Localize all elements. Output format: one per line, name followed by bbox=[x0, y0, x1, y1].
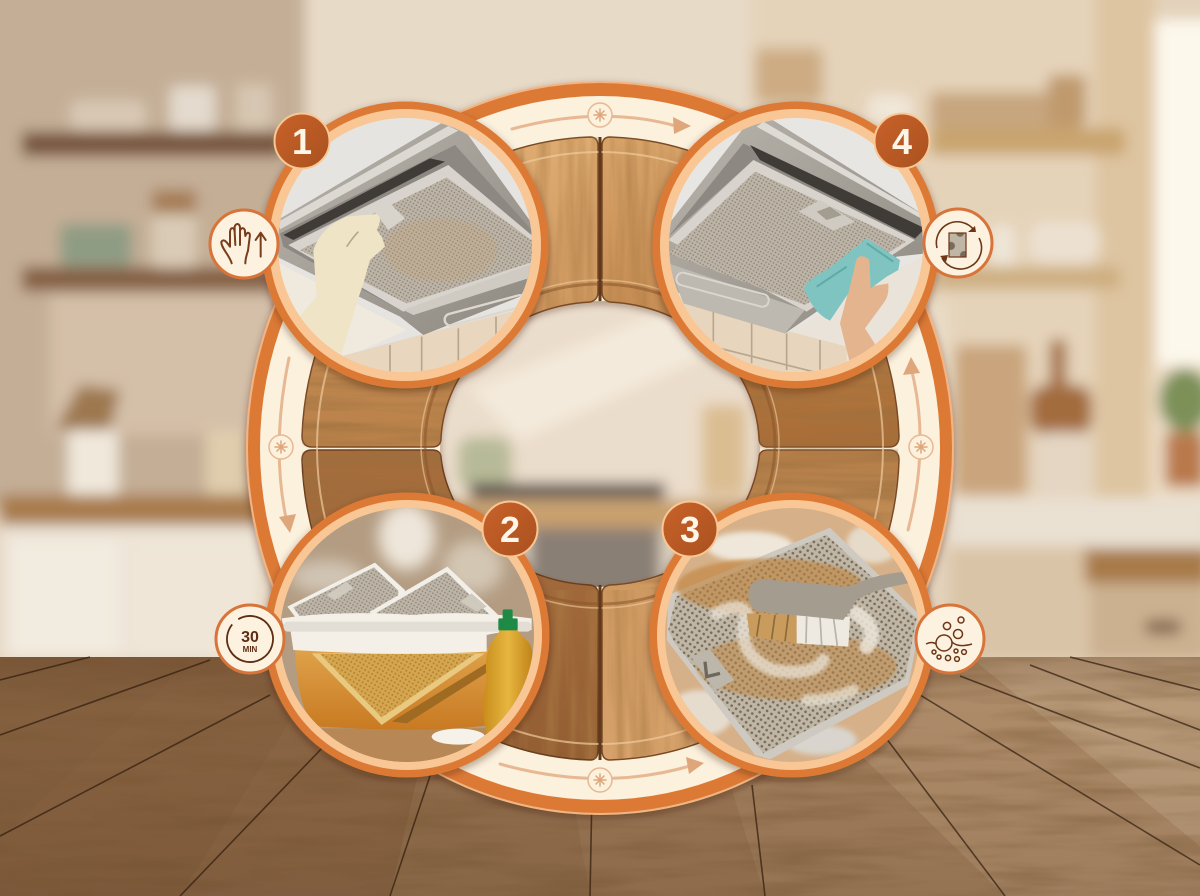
wooden table planks bbox=[0, 657, 1200, 896]
photo: hand wiping clean filter with teal cloth bbox=[669, 118, 923, 372]
number badge 1 bbox=[274, 114, 330, 168]
icon: filter with refresh arrows bbox=[924, 209, 992, 277]
number badge 2: 2 bbox=[500, 509, 520, 550]
icon: 30 minute timer: MIN bbox=[243, 645, 258, 654]
board: top left bbox=[302, 137, 598, 447]
arrow: bottom bbox=[500, 757, 704, 792]
blurred kitchen background bbox=[0, 0, 1200, 680]
number badge 1: 1 bbox=[292, 121, 312, 162]
number badge 4: 4 bbox=[892, 121, 912, 162]
circular flow ring bbox=[246, 81, 954, 815]
photo: gloved hand removing hood filter bbox=[278, 118, 532, 372]
icon: foam bubbles bbox=[916, 605, 984, 673]
icon: 30 minute timer bbox=[216, 605, 284, 673]
number badge 3: 3 bbox=[680, 509, 700, 550]
arrow: left bbox=[269, 358, 296, 533]
arrow: top bbox=[512, 103, 691, 134]
step 1 circle: pull out the filter bbox=[262, 102, 550, 390]
board: top right bbox=[602, 137, 899, 447]
wooden board segments bbox=[300, 130, 900, 765]
step 4 circle: wipe dry and refit bbox=[650, 100, 943, 393]
photo: brush scrubbing greasy filter bbox=[665, 508, 918, 762]
board: bottom left bbox=[302, 450, 598, 760]
number badge 2 bbox=[482, 502, 538, 556]
wood grain texture bbox=[300, 130, 900, 765]
board: bottom right bbox=[602, 450, 899, 760]
step 2 circle: soak in hot soapy water bbox=[264, 492, 550, 778]
flow arrows along ring bbox=[269, 103, 933, 792]
board grooves bbox=[317, 152, 883, 744]
photo: filters soaking in a soapy tub bbox=[280, 508, 534, 762]
step 3 circle: scrub with a brush bbox=[650, 492, 934, 778]
icon: hand lifting up bbox=[210, 210, 278, 278]
number badge 3 bbox=[662, 502, 718, 556]
icon: 30 minute timer: 30 bbox=[241, 629, 259, 646]
arrow: right bbox=[903, 357, 933, 530]
number badge 4 bbox=[874, 114, 930, 168]
